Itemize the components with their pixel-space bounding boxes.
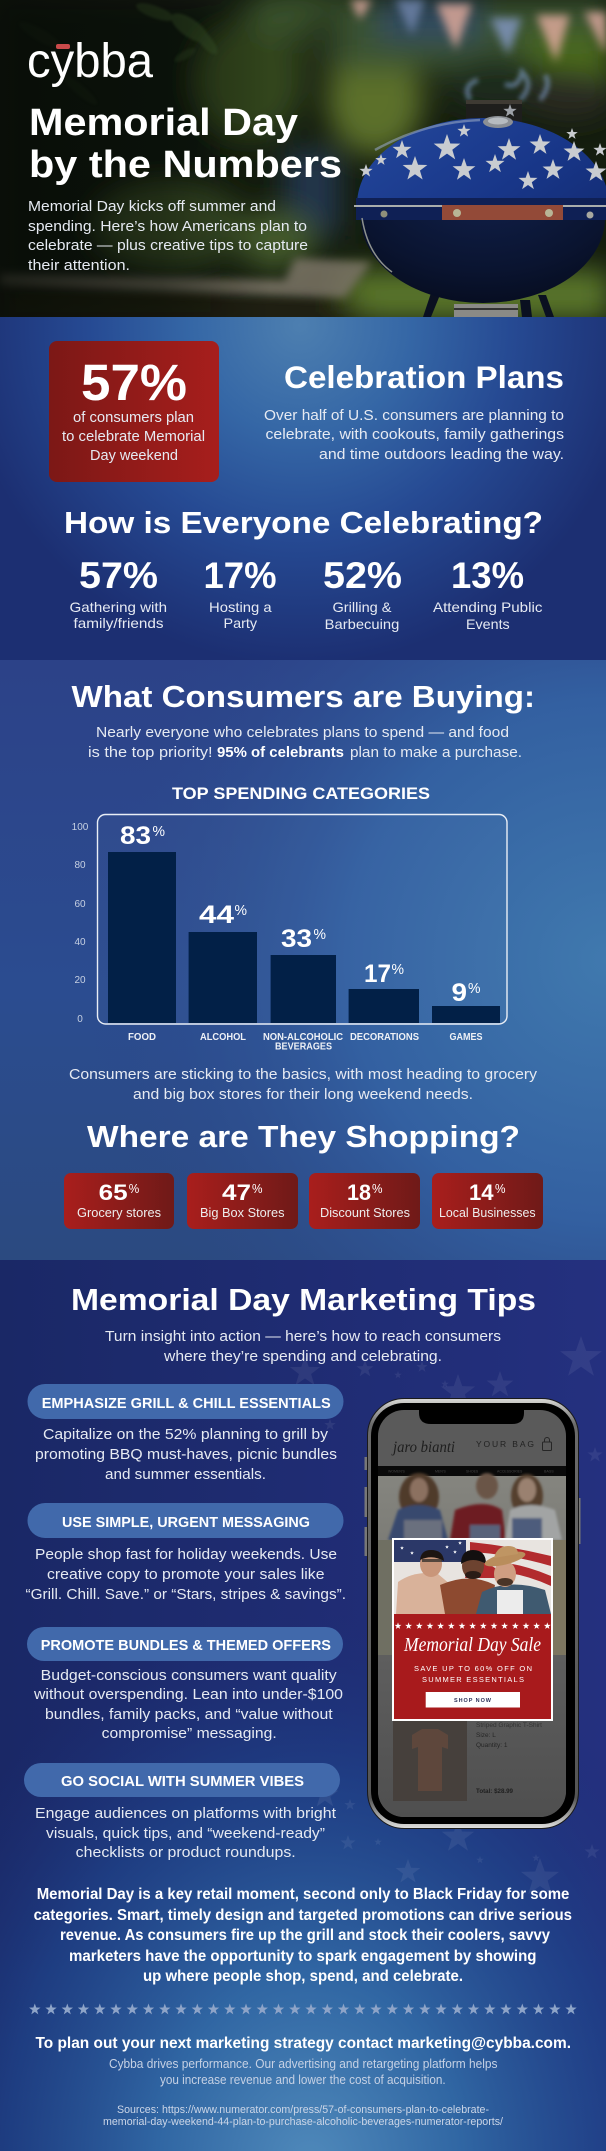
product details bbox=[476, 1722, 542, 1795]
panel: marketing tips bbox=[0, 1260, 606, 2151]
callout: 57 percent bbox=[49, 341, 219, 482]
bar: games bbox=[432, 979, 500, 1043]
text: celebration summary: and time outdoors leading the way. bbox=[319, 446, 564, 463]
tip 4: social: checklists or product roundups. bbox=[76, 1844, 296, 1861]
hero photo dimmed bbox=[378, 1473, 566, 1655]
card: big box stores: 47 bbox=[222, 1180, 251, 1205]
heading: Celebration Plans: Celebration Plans bbox=[284, 359, 564, 395]
closing statement: up where people shop, spend, and celebrate. bbox=[143, 1968, 463, 1985]
nav bar: MEN'S bbox=[435, 1470, 446, 1474]
heading: Where are They Shopping: Where are They Shopping? bbox=[87, 1119, 520, 1154]
phone notch bbox=[419, 1408, 524, 1424]
text: buying summary: Nearly everyone who celebrates plans to spend — and food bbox=[96, 724, 509, 741]
text: tips intro: where they’re spending and celebrating. bbox=[163, 1348, 442, 1365]
text: about cybba: you increase revenue and lower the cost of acquisition. bbox=[160, 2072, 446, 2087]
text: basics summary bbox=[69, 1066, 538, 1103]
intro text: spending. Here’s how Americans plan to bbox=[28, 218, 307, 235]
bar: games: GAMES bbox=[450, 1032, 483, 1043]
logo: cybba: cybba bbox=[27, 35, 153, 88]
popup ad bbox=[392, 1538, 553, 1721]
text: sources: Sources: https://www.numerator.com/press/57-of-consumers-plan-to-celebrate- bbox=[117, 2104, 489, 2116]
card: discount stores: Discount Stores bbox=[320, 1205, 410, 1220]
tip 3: bundles: compromise” messaging. bbox=[102, 1725, 277, 1742]
bar: non-alcoholic beverages bbox=[263, 925, 343, 1052]
text: sources: memorial-day-weekend-44-plan-to-purchase-alcoholic-beverages-numerator-reports/ bbox=[103, 2116, 504, 2128]
nav bar bbox=[378, 1466, 566, 1476]
bar: decorations bbox=[349, 960, 419, 1043]
stat: grilling: 52% bbox=[323, 555, 402, 596]
foliage bbox=[136, 3, 216, 62]
y axis: 0 bbox=[77, 1014, 83, 1025]
y axis: 40 bbox=[74, 937, 86, 948]
stat: hosting bbox=[204, 555, 276, 631]
grill vent bbox=[466, 100, 522, 122]
decorative star field bbox=[290, 1336, 603, 1894]
bar: non-alcoholic beverages: BEVERAGES bbox=[275, 1042, 332, 1052]
text: buying summary bbox=[88, 724, 522, 761]
bar: food: FOOD bbox=[128, 1032, 156, 1043]
heading: Memorial Day Marketing Tips: Memorial Day Marketing Tips bbox=[71, 1282, 536, 1317]
shirt thumbnail bbox=[393, 1721, 467, 1801]
stat: gathering: 57% bbox=[79, 555, 158, 596]
y axis: 80 bbox=[74, 860, 86, 871]
product details: Quantity: 1 bbox=[476, 1742, 508, 1749]
popup photo bbox=[394, 1540, 551, 1614]
product details: Striped Graphic T-Shirt bbox=[476, 1722, 542, 1729]
bar: games: % bbox=[468, 981, 481, 997]
tip 3: bundles: Budget-conscious consumers want quality bbox=[41, 1667, 337, 1684]
closing statement: marketers have the opportunity to spark engagement by showing bbox=[69, 1948, 536, 1965]
heading: How is Everyone Celebrating: How is Everyone Celebrating? bbox=[64, 505, 543, 540]
panel: celebration bbox=[0, 317, 606, 660]
star divider bbox=[29, 2004, 577, 2014]
heading: top spending categories: TOP SPENDING CATEGORIES bbox=[172, 784, 430, 803]
grill legs and ash catcher bbox=[423, 294, 554, 317]
tip 1: grill and chill: and summer essentials. bbox=[105, 1466, 266, 1483]
card: local businesses: 14 bbox=[469, 1180, 494, 1205]
tip 2: urgent messaging: People shop fast for holiday weekends. Use bbox=[35, 1546, 337, 1563]
y axis: 20 bbox=[74, 975, 86, 986]
nav bar: BAGS bbox=[544, 1470, 554, 1474]
stat: hosting: Hosting a bbox=[209, 599, 272, 615]
text: buying summary: plan to make a purchase. bbox=[350, 744, 522, 761]
stat: hosting: 17% bbox=[204, 555, 276, 596]
bar: non-alcoholic beverages: 33 bbox=[281, 925, 312, 953]
person left bbox=[396, 1550, 448, 1614]
text: celebration summary: celebrate, with cookouts, family gatherings bbox=[266, 426, 564, 443]
card: local businesses bbox=[432, 1173, 543, 1229]
nav bar: SHOES bbox=[466, 1470, 479, 1474]
callout: 57 percent: Day weekend bbox=[90, 447, 178, 464]
bar: food: 83 bbox=[120, 822, 151, 850]
popup button: SHOP NOW bbox=[454, 1698, 492, 1704]
bar: alcohol bbox=[189, 901, 257, 1043]
intro text: celebrate — plus creative tips to capture bbox=[28, 237, 308, 254]
tip 1: grill and chill: EMPHASIZE GRILL & CHILL ESSENTIALS bbox=[42, 1395, 331, 1412]
popup stars bbox=[395, 1622, 551, 1629]
callout: 57 percent: 57% bbox=[81, 354, 187, 411]
bar: alcohol: 44 bbox=[199, 901, 234, 929]
lower cart area bbox=[378, 1721, 566, 1817]
stat: grilling bbox=[323, 555, 402, 632]
card: grocery stores bbox=[64, 1173, 174, 1229]
bar chart: top spending categories bbox=[72, 814, 507, 1052]
bar: alcohol: % bbox=[234, 903, 247, 919]
heading: What Consumers are Buying: What Consumers are Buying: bbox=[72, 679, 535, 714]
stat: gathering bbox=[70, 555, 167, 631]
bar: decorations: 17 bbox=[364, 960, 391, 988]
panel: what consumers are buying bbox=[0, 660, 606, 1260]
title: Memorial Day bbox=[29, 102, 298, 144]
call to action: To plan out your next marketing strategy contact marketing@cybba.com. bbox=[36, 2035, 571, 2052]
card: grocery stores: Grocery stores bbox=[77, 1205, 161, 1220]
stat: hosting: Party bbox=[224, 615, 257, 631]
card: discount stores: 18 bbox=[347, 1180, 371, 1205]
text: tips intro bbox=[105, 1328, 501, 1365]
closing statement: revenue. As consumers fire up the grill and stock their coolers, savvy bbox=[60, 1927, 550, 1944]
closing statement: categories. Smart, timely design and targeted promotions can drive serious bbox=[34, 1907, 572, 1924]
tip 3: bundles: PROMOTE BUNDLES & THEMED OFFERS bbox=[41, 1637, 331, 1654]
header photo: patriotic grill in backyard bbox=[0, 0, 606, 320]
popup offer: SAVE UP TO 60% OFF ON bbox=[414, 1664, 532, 1673]
card: grocery stores: 65 bbox=[99, 1180, 128, 1205]
tip 2: urgent messaging: creative copy to promote your sales like bbox=[47, 1566, 324, 1583]
card: big box stores: Big Box Stores bbox=[200, 1205, 285, 1220]
stat: grilling: Barbecuing bbox=[325, 616, 399, 632]
grill knob bbox=[483, 116, 513, 128]
card: grocery stores: % bbox=[129, 1181, 140, 1196]
person middle bbox=[440, 1550, 495, 1614]
text: about cybba: Cybba drives performance. Our advertising and retargeting platform helps bbox=[109, 2056, 498, 2071]
nav bar: WOMEN'S bbox=[388, 1470, 405, 1474]
card: discount stores: % bbox=[372, 1181, 383, 1196]
text: basics summary: Consumers are sticking to the basics, with most heading to grocery bbox=[69, 1066, 538, 1083]
text: celebration summary bbox=[264, 407, 564, 463]
card: big box stores: % bbox=[252, 1181, 263, 1196]
your bag: YOUR BAG bbox=[476, 1439, 534, 1449]
tip 3: bundles bbox=[27, 1627, 343, 1742]
stat: gathering: Gathering with bbox=[70, 599, 167, 615]
title bbox=[29, 102, 342, 186]
tip 4: social: visuals, quick tips, and “weekend-ready” bbox=[46, 1825, 325, 1842]
popup button bbox=[426, 1692, 520, 1708]
intro text bbox=[28, 198, 308, 274]
bar: alcohol: ALCOHOL bbox=[200, 1032, 246, 1043]
stat: public events: Events bbox=[466, 616, 510, 632]
intro text: Memorial Day kicks off summer and bbox=[28, 198, 276, 215]
tip 4: social: Engage audiences on platforms with bright bbox=[35, 1805, 337, 1822]
tip 2: urgent messaging bbox=[26, 1503, 346, 1603]
closing statement bbox=[34, 1886, 572, 1985]
phone mockup bbox=[364, 1398, 580, 1828]
stat: public events bbox=[433, 555, 542, 632]
closing statement: Memorial Day is a key retail moment, second only to Black Friday for some bbox=[37, 1886, 570, 1903]
bar: food: % bbox=[152, 824, 165, 840]
grill dome bbox=[358, 118, 606, 198]
text: buying summary: is the top priority! bbox=[88, 744, 213, 761]
tip 3: bundles: without overspending. Lean into under-$100 bbox=[33, 1686, 343, 1703]
bar: non-alcoholic beverages: % bbox=[314, 927, 326, 943]
y axis: 100 bbox=[72, 822, 89, 833]
popup offer: SUMMER ESSENTIALS bbox=[422, 1675, 524, 1684]
y axis bbox=[72, 822, 89, 1025]
text: celebration summary: Over half of U.S. consumers are planning to bbox=[264, 407, 564, 424]
text: tips intro: Turn insight into action — here’s how to reach consumers bbox=[105, 1328, 501, 1345]
phone screen bbox=[378, 1410, 566, 1817]
tip 1: grill and chill: Capitalize on the 52% planning to grill by bbox=[43, 1426, 329, 1443]
grill band and handle bbox=[354, 198, 606, 272]
bar: decorations: DECORATIONS bbox=[350, 1032, 419, 1043]
stat: public events: 13% bbox=[451, 555, 524, 596]
grill bowl bbox=[361, 220, 605, 303]
text: sources bbox=[103, 2104, 504, 2128]
tip 1: grill and chill: promoting BBQ must-haves, picnic bundles bbox=[35, 1446, 337, 1463]
text: about cybba bbox=[109, 2056, 498, 2087]
tip 3: bundles: bundles, family packs, and “value without bbox=[45, 1706, 334, 1723]
y axis: 60 bbox=[74, 899, 86, 910]
callout: 57 percent: of consumers plan bbox=[73, 409, 194, 426]
bar: food bbox=[108, 822, 176, 1043]
tip 2: urgent messaging: “Grill. Chill. Save.” or “Stars, stripes & savings”. bbox=[26, 1586, 346, 1603]
tip 4: social bbox=[24, 1763, 340, 1861]
site logo: jaro bianti bbox=[391, 1439, 455, 1456]
product details: Size: L bbox=[476, 1732, 496, 1739]
tip 4: social: GO SOCIAL WITH SUMMER VIBES bbox=[61, 1773, 304, 1790]
card: local businesses: % bbox=[495, 1181, 506, 1196]
bar: decorations: % bbox=[392, 962, 404, 978]
text: buying summary: 95% of celebrants bbox=[217, 744, 344, 761]
tip 1: grill and chill bbox=[28, 1384, 344, 1483]
callout: 57 percent: to celebrate Memorial bbox=[62, 428, 205, 445]
card: discount stores bbox=[309, 1173, 420, 1229]
nav bar: ACCESSORIES bbox=[497, 1470, 523, 1474]
popup offer bbox=[414, 1666, 532, 1682]
bar: games: 9 bbox=[452, 979, 467, 1007]
popup headline: Memorial Day Sale bbox=[403, 1634, 541, 1656]
tip 2: urgent messaging: USE SIMPLE, URGENT MESSAGING bbox=[62, 1514, 310, 1531]
stat: grilling: Grilling & bbox=[332, 599, 392, 615]
text: basics summary: and big box stores for their long weekend needs. bbox=[133, 1086, 473, 1103]
card: local businesses: Local Businesses bbox=[439, 1205, 536, 1220]
product details: Total: $28.99 bbox=[476, 1788, 513, 1795]
card: big box stores bbox=[187, 1173, 298, 1229]
person right bbox=[476, 1546, 551, 1614]
bar: non-alcoholic beverages: NON-ALCOHOLIC bbox=[263, 1032, 343, 1043]
icon: bag bbox=[542, 1438, 552, 1450]
stat: public events: Attending Public bbox=[433, 599, 542, 615]
stat: gathering: family/friends bbox=[74, 615, 164, 631]
title: by the Numbers bbox=[29, 144, 342, 186]
intro text: their attention. bbox=[28, 257, 130, 274]
icon: grill smoke bbox=[467, 72, 548, 100]
